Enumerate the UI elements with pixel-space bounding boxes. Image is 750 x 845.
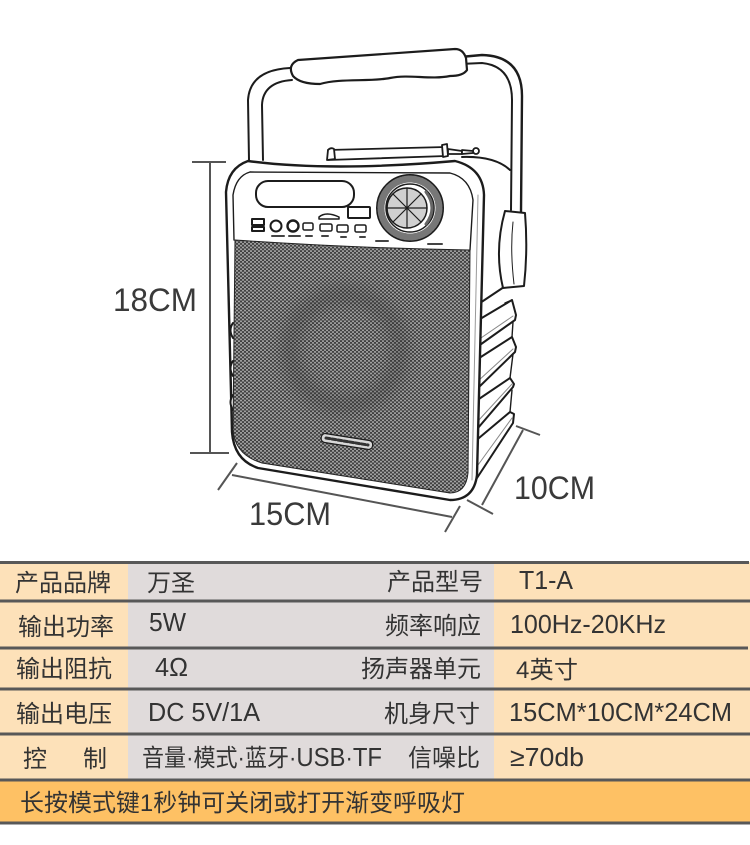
dimension: height 18CM <box>190 162 229 453</box>
row: power and frequency response: 频率响应 <box>385 613 481 640</box>
row: controls and signal-to-noise ratio <box>23 742 584 773</box>
footer note: 长按模式键1秒钟可关闭或打开渐变呼吸灯 <box>20 790 465 817</box>
brand badge <box>321 433 373 450</box>
side knob <box>499 211 526 288</box>
row: power and frequency response: 100Hz-20KHz <box>510 609 666 639</box>
side bumps <box>230 323 233 410</box>
display window <box>256 181 354 207</box>
label: 15CM: 15CM <box>249 496 331 532</box>
row: controls and signal-to-noise ratio: 制 <box>83 746 107 773</box>
row: voltage and body size: 15CM*10CM*24CM <box>509 697 732 727</box>
row: brand and model <box>15 565 574 597</box>
volume dial <box>377 175 443 241</box>
row: impedance and driver unit <box>16 652 578 684</box>
row: controls and signal-to-noise ratio: 控 <box>23 746 47 773</box>
row: controls and signal-to-noise ratio: 信噪比 <box>408 745 480 772</box>
grille speaker shadow <box>290 295 400 405</box>
row: power and frequency response: 5W <box>149 607 186 637</box>
row: impedance and driver unit: 扬声器单元 <box>361 656 481 683</box>
dimension: width 15CM <box>218 463 460 532</box>
row: impedance and driver unit: 4Ω <box>155 652 188 682</box>
back of cabinet <box>462 157 510 170</box>
row: impedance and driver unit: 输出阻抗 <box>16 656 112 683</box>
label: 10CM: 10CM <box>514 470 595 506</box>
row: brand and model: 万圣 <box>147 570 195 597</box>
row: voltage and body size: 机身尺寸 <box>384 701 480 728</box>
table rules <box>0 562 750 823</box>
row: brand and model: 产品型号 <box>387 569 483 596</box>
row: voltage and body size: DC 5V/1A <box>148 697 261 727</box>
antenna <box>327 144 479 160</box>
row: impedance and driver unit: 4英寸 <box>516 657 578 684</box>
table backgrounds <box>0 562 750 823</box>
speaker line drawing <box>226 49 526 500</box>
row: power and frequency response: 输出功率 <box>18 614 114 641</box>
row: brand and model: 产品品牌 <box>15 570 111 597</box>
label: 18CM: 18CM <box>113 282 197 318</box>
row: power and frequency response <box>18 607 666 641</box>
handle <box>248 49 522 212</box>
dimension: depth 10CM <box>467 426 540 514</box>
specification table <box>0 562 750 823</box>
side ribs <box>473 287 516 478</box>
speaker grille <box>233 240 470 493</box>
row: controls and signal-to-noise ratio: 音量·模式·蓝牙·USB·TF <box>142 742 382 772</box>
row: brand and model: T1-A <box>519 565 574 595</box>
row: controls and signal-to-noise ratio: ≥70db <box>510 742 584 772</box>
row: voltage and body size: 输出电压 <box>16 701 112 728</box>
control panel buttons <box>252 207 442 244</box>
cabinet front <box>226 161 484 500</box>
row: voltage and body size <box>16 697 732 728</box>
